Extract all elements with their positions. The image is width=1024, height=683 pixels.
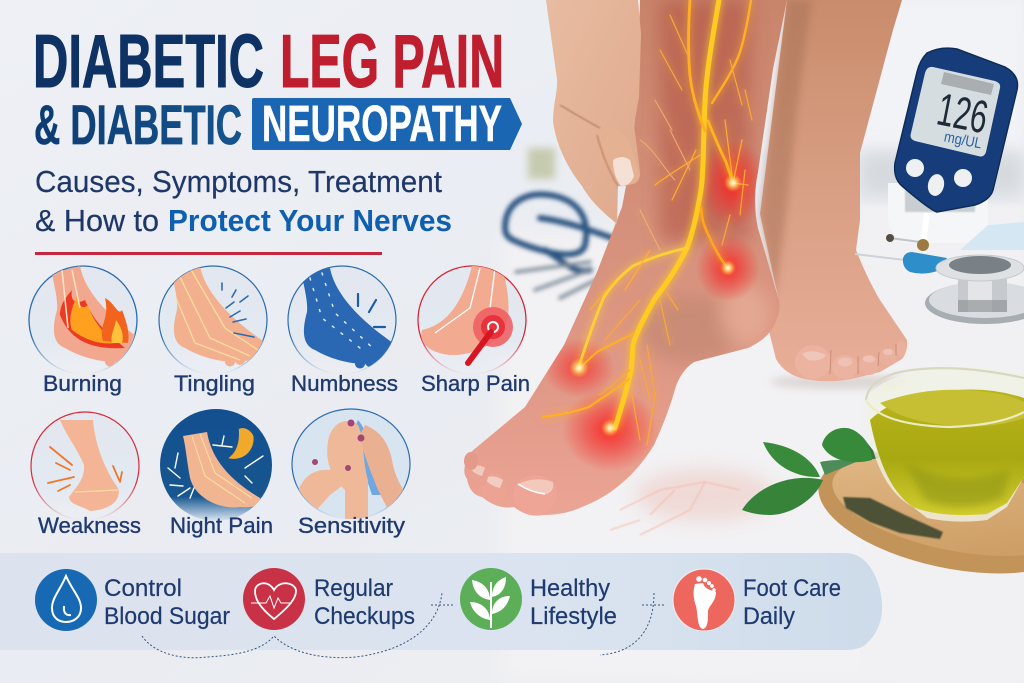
icon: numbness [288,266,398,374]
text: control blood sugar [104,575,230,630]
background leg and foot [760,0,907,381]
glucose meter: 126 [933,83,992,143]
text: regular checkups: Checkups [314,603,415,630]
text: foot care daily: Daily [743,603,795,630]
icon: sharp pain [418,266,526,374]
cup of green tea [866,368,1024,522]
main leg and foot with glowing nerves [464,0,787,516]
label: weakness: Weakness [38,513,141,538]
icon: blood drop [35,569,97,631]
label: sensitivity: Sensitivity [298,513,405,538]
hand holding the leg [546,0,641,224]
icon: plant [460,568,522,630]
title leg pain: LEG PAIN [280,19,504,103]
subtitle: Protect Your Nerves [168,203,452,238]
text: healthy lifestyle: Healthy [530,575,610,602]
icon: foot [673,569,735,631]
text: foot care daily: Foot Care [743,575,841,602]
title line 2: & DIABETIC [34,93,242,156]
text: regular checkups [314,575,415,630]
icon: heart [243,568,305,630]
label: sharp pain: Sharp Pain [421,371,530,396]
label: tingling: Tingling [174,371,255,396]
panel: prevention band [0,553,882,658]
green leaves [742,428,879,515]
title [33,19,522,156]
text: control blood sugar: Blood Sugar [104,603,230,630]
text: healthy lifestyle: Lifestyle [530,603,617,630]
red divider [35,252,382,255]
neuropathy badge: NEUROPATHY [262,95,502,152]
glucose meter: mg/UL [943,129,983,152]
text: foot care daily [743,575,841,630]
icon: night pain [160,409,272,521]
subtitle: Causes, Symptoms, Treatment [35,164,442,199]
text: regular checkups: Regular [314,575,393,602]
toes [464,452,557,515]
text: control blood sugar: Control [104,575,182,602]
subtitle: & How to [35,203,159,238]
dashed connector lines [142,593,666,658]
icon: tingling [159,266,268,374]
tea saucer [807,429,1024,595]
title line 1: DIABETIC [33,19,264,103]
icon: sensitivity [292,409,410,525]
icon: weakness [31,412,139,520]
nerves [543,0,752,445]
glucose meter [886,48,1024,251]
text: healthy lifestyle [530,575,617,630]
label: burning: Burning [43,371,122,396]
blurred clinic backdrop [500,0,1024,683]
subtitle [35,164,452,238]
blurred stethoscope tubing [505,194,612,298]
floor shadows [635,375,910,521]
label: numbness: Numbness [291,371,398,396]
floor nerve sparks [610,482,740,535]
icon: burning [29,266,148,374]
label: night pain: Night Pain [170,513,273,538]
stethoscope chest piece [855,252,1024,324]
